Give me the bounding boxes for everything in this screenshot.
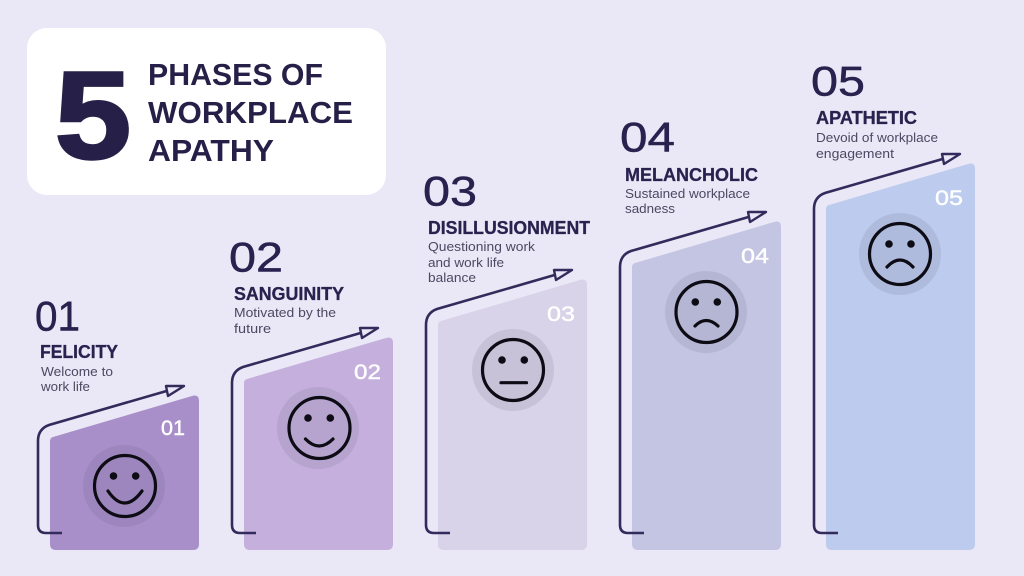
phase 01 description xyxy=(40,364,113,394)
phase 01 description: work life xyxy=(40,379,90,394)
phase 03 panel xyxy=(438,280,587,550)
phase 05 panel xyxy=(826,164,975,550)
phase 04 slightly sad face icon xyxy=(665,271,747,353)
phase 05 description: engagement xyxy=(816,146,894,161)
phase 05 description: Devoid of workplace xyxy=(816,130,938,145)
phase 04 description: sadness xyxy=(625,201,676,216)
phase 03 growth arrow xyxy=(426,270,572,533)
phase 01 description: Welcome to xyxy=(41,364,113,379)
phase 03 heading: DISILLUSIONMENT xyxy=(428,218,590,238)
phase 03 neutral face icon xyxy=(472,329,554,411)
phase 03 description: and work life xyxy=(428,255,504,270)
phase 04 panel xyxy=(632,222,781,550)
phase 02 description: future xyxy=(234,321,271,336)
phase 05 large number: 05 xyxy=(811,58,865,104)
phase 02 description: Motivated by the xyxy=(234,305,336,320)
phase 01 happy face icon xyxy=(83,445,165,527)
phase 05 panel number: 05 xyxy=(935,187,963,210)
phase 05 growth arrow xyxy=(814,154,960,533)
phase 03 description: Questioning work xyxy=(428,239,536,254)
phase 01 heading: FELICITY xyxy=(40,342,118,362)
phase 02 panel number: 02 xyxy=(354,361,381,384)
phase 04 description xyxy=(625,186,750,216)
phase 05 heading: APATHETIC xyxy=(816,108,917,128)
phase 02 description xyxy=(234,305,336,336)
phase 03 large number: 03 xyxy=(423,168,477,214)
phase 02 heading: SANGUINITY xyxy=(234,284,344,304)
phase 03 panel number: 03 xyxy=(547,303,575,326)
phase 01 large number: 01 xyxy=(35,292,80,340)
title card: PHASES OF xyxy=(148,57,323,92)
phase 05 sad face icon xyxy=(859,213,941,295)
phase 05: apathetic xyxy=(811,58,975,550)
title card: WORKPLACE xyxy=(148,95,353,130)
title card: APATHY xyxy=(148,133,274,168)
title card: 5 xyxy=(55,47,131,185)
phase 04 growth arrow xyxy=(620,212,766,533)
phase 04 description: Sustained workplace xyxy=(625,186,750,201)
phase 02 large number: 02 xyxy=(229,234,283,280)
phase 02: sanguinity xyxy=(229,234,393,550)
phase 04 panel number: 04 xyxy=(741,245,769,268)
phase 03 description xyxy=(428,239,536,285)
phase 01: felicity xyxy=(35,292,199,550)
phase 05 description xyxy=(816,130,938,161)
phase 02 panel xyxy=(244,338,393,550)
phase 04 heading: MELANCHOLIC xyxy=(625,165,758,185)
phase 01 panel number: 01 xyxy=(161,417,185,440)
phase 02 growth arrow xyxy=(232,328,378,533)
title card xyxy=(27,28,386,195)
phase 04 large number: 04 xyxy=(620,114,675,160)
phase 03 description: balance xyxy=(428,270,476,285)
phase 01 panel xyxy=(50,396,199,550)
phase 02 happy face icon xyxy=(277,387,359,469)
phase 04: melancholic xyxy=(620,114,781,550)
phase 03: disillusionment xyxy=(423,168,590,550)
phase 01 growth arrow xyxy=(38,386,184,533)
